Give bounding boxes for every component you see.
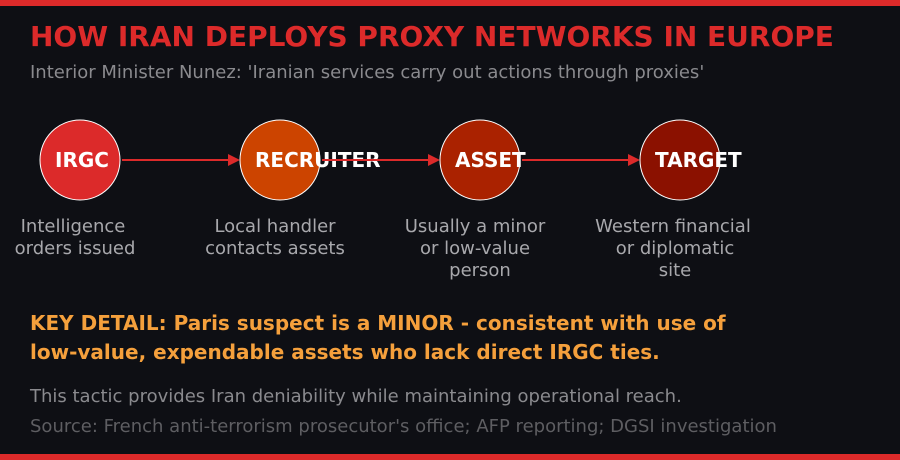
arrow 3 bbox=[522, 154, 640, 166]
node: TARGET: TARGET bbox=[655, 148, 742, 172]
title: HOW IRAN DEPLOYS PROXY NETWORKS IN EUROPE bbox=[30, 20, 834, 53]
desc: IRGC: orders issued bbox=[15, 238, 135, 259]
desc: target: or diplomatic bbox=[616, 238, 734, 259]
node: IRGC: IRGC bbox=[55, 148, 109, 172]
desc: target: Western financial bbox=[595, 216, 751, 237]
desc: asset: Usually a minor bbox=[405, 216, 545, 237]
arrow 1 bbox=[122, 154, 240, 166]
node: ASSET bbox=[440, 120, 526, 200]
node: ASSET: ASSET bbox=[455, 148, 526, 172]
desc: target: site bbox=[659, 260, 691, 281]
key detail callout: low-value, expendable assets who lack direct IRGC ties. bbox=[30, 340, 660, 364]
desc: asset: or low-value bbox=[420, 238, 530, 259]
desc: recruiter: Local handler bbox=[214, 216, 336, 237]
desc: IRGC: Intelligence bbox=[21, 216, 125, 237]
source: Source: French anti-terrorism prosecutor's office; AFP reporting; DGSI investigation bbox=[30, 416, 777, 437]
step descriptions bbox=[15, 216, 751, 281]
subtitle: Interior Minister Nunez: 'Iranian services carry out actions through proxies' bbox=[30, 62, 704, 83]
note text: This tactic provides Iran deniability while maintaining operational reach. bbox=[29, 386, 682, 407]
desc: recruiter: contacts assets bbox=[205, 238, 345, 259]
key detail callout: KEY DETAIL: Paris suspect is a MINOR - consistent with use of bbox=[30, 311, 726, 335]
arrow 2 bbox=[322, 154, 440, 166]
node: RECRUITER: RECRUITER bbox=[255, 148, 381, 172]
node: IRGC bbox=[40, 120, 120, 200]
node: TARGET bbox=[640, 120, 742, 200]
flow diagram bbox=[40, 120, 742, 200]
desc: asset: person bbox=[449, 260, 511, 281]
node: RECRUITER bbox=[240, 120, 381, 200]
